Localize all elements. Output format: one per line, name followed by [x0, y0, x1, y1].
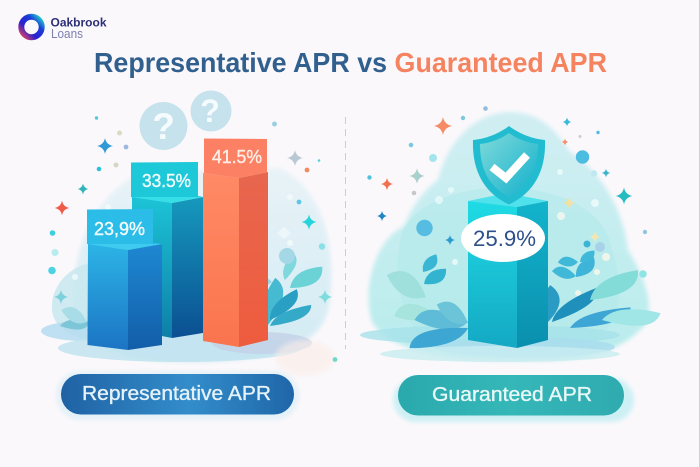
- icon: question bubbles: ?: [200, 93, 220, 129]
- icon: right foliage: [386, 240, 661, 349]
- label pill: representative APR: Representative APR: [82, 383, 271, 405]
- logo wordmark: Loans: [51, 27, 83, 41]
- value badge: 25.9%: 25.9%: [473, 226, 536, 251]
- value label: 33.5%: [142, 171, 191, 191]
- icon: shield check: [473, 126, 545, 204]
- icon: left foliage: [54, 248, 332, 332]
- logo wordmark: [50, 16, 107, 41]
- icon: question bubbles: [140, 90, 232, 150]
- bar: 41.5%: [203, 138, 268, 347]
- logo: [21, 16, 107, 41]
- label pill: representative APR: [56, 371, 299, 420]
- background blob: right: [360, 112, 649, 362]
- value badge: 25.9%: [461, 214, 545, 262]
- bar: 23,9%: [87, 209, 162, 350]
- bar: guaranteed 25.9%: [468, 193, 548, 348]
- sparkles: left: [48, 116, 337, 362]
- icon: question bubbles: ?: [152, 106, 175, 147]
- panel: guaranteed APR: [360, 106, 661, 422]
- panel: representative APR: [41, 90, 337, 420]
- divider: [344, 117, 346, 349]
- label pill: guaranteed APR: Guaranteed APR: [432, 384, 592, 406]
- value label: 23,9%: [94, 219, 145, 239]
- icon: logo ring: [21, 17, 42, 37]
- label pill: guaranteed APR: [393, 375, 634, 422]
- value label: 41.5%: [212, 147, 262, 167]
- logo wordmark: Oakbrook: [50, 16, 107, 30]
- sparkles: right: [367, 106, 647, 278]
- title: Representative APR vs Guaranteed APR: [94, 47, 607, 78]
- background blob: left: [41, 168, 335, 376]
- bar: 33.5%: [131, 162, 203, 338]
